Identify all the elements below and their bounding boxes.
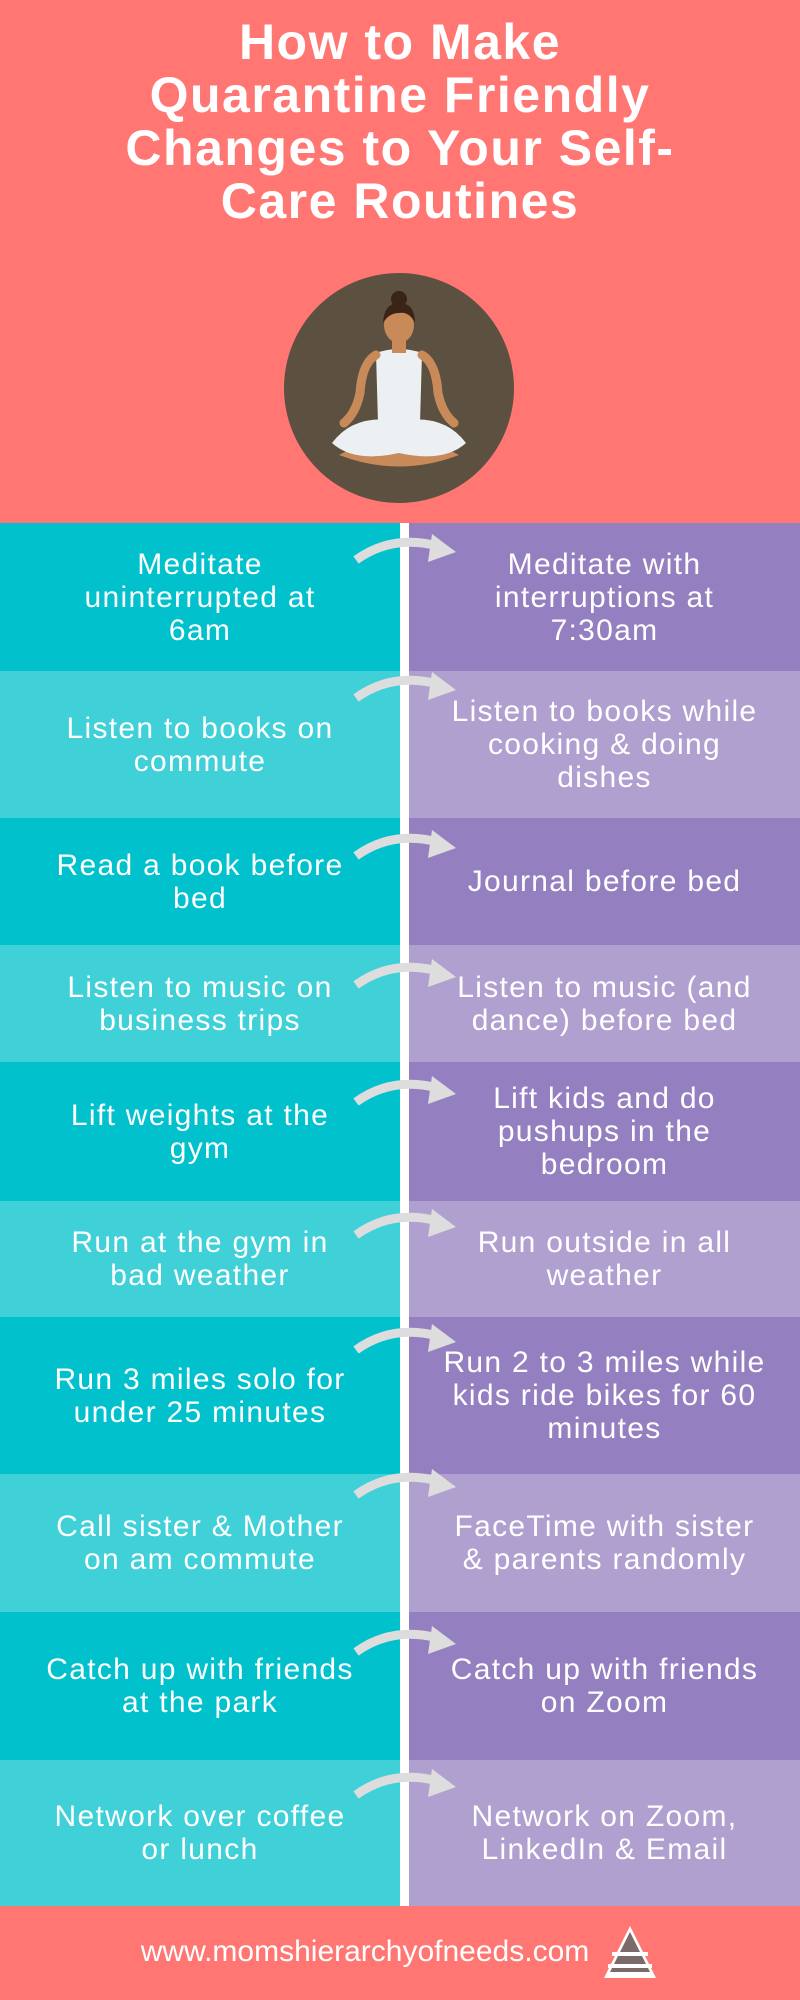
row 8: Call sister & Mother xyxy=(56,1510,344,1543)
row 9: Catch up with friends xyxy=(451,1653,758,1686)
footer xyxy=(0,1906,800,2000)
row 1: 6am xyxy=(169,614,231,646)
row 5: bedroom xyxy=(541,1148,668,1181)
row 4: Listen to music on xyxy=(67,970,333,1004)
row 2: Listen to books on xyxy=(67,712,333,744)
title xyxy=(125,14,675,229)
row 8: FaceTime with sister xyxy=(455,1510,754,1543)
row 3: Read a book before xyxy=(57,848,343,882)
row 5: Lift weights at the xyxy=(71,1098,329,1132)
row 3: bed xyxy=(173,882,227,914)
header xyxy=(0,0,800,523)
row 2 xyxy=(0,671,800,818)
row 8 xyxy=(0,1474,800,1612)
row 6: Run outside in all xyxy=(478,1226,731,1259)
row 9: at the park xyxy=(122,1686,278,1719)
row 10: or lunch xyxy=(141,1833,259,1866)
row 10: Network on Zoom, xyxy=(472,1800,737,1833)
title: Care Routines xyxy=(221,173,579,229)
title: Changes to Your Self- xyxy=(125,120,675,176)
row 7 xyxy=(0,1317,800,1474)
row 6: Run at the gym in xyxy=(71,1226,329,1259)
row 4: business trips xyxy=(99,1004,301,1036)
row 1: Meditate with xyxy=(508,548,701,580)
row 7: minutes xyxy=(547,1412,662,1445)
icon: pyramid logo xyxy=(604,1926,656,1978)
row 2: cooking & doing xyxy=(488,728,721,761)
divider xyxy=(400,523,409,1906)
icon: meditating woman xyxy=(284,273,514,503)
row 4: dance) before bed xyxy=(472,1004,737,1036)
row 10 xyxy=(0,1760,800,1906)
row 9 xyxy=(0,1612,800,1760)
row 4: Listen to music (and xyxy=(457,970,752,1004)
row 1: interruptions at xyxy=(495,580,714,614)
row 6: weather xyxy=(547,1259,662,1292)
row 1 xyxy=(0,523,800,671)
row 2: dishes xyxy=(557,761,652,794)
row 7: Run 2 to 3 miles while xyxy=(443,1346,766,1379)
row 2: Listen to books while xyxy=(452,695,757,728)
footer url: www.momshierarchyofneeds.com xyxy=(141,1935,589,1968)
row 9: on Zoom xyxy=(541,1686,668,1719)
row 1: 7:30am xyxy=(551,614,658,646)
row 6: bad weather xyxy=(110,1259,290,1292)
row 7: under 25 minutes xyxy=(74,1396,326,1428)
row 5: gym xyxy=(170,1132,230,1164)
row 8: on am commute xyxy=(84,1543,316,1576)
row 10: LinkedIn & Email xyxy=(482,1833,727,1866)
title: How to Make xyxy=(239,14,561,70)
row 3 xyxy=(0,818,800,945)
row 7: Run 3 miles solo for xyxy=(54,1362,346,1396)
row 1: uninterrupted at xyxy=(85,580,315,614)
row 1: Meditate xyxy=(137,548,263,580)
row 9: Catch up with friends xyxy=(46,1653,354,1686)
row 6 xyxy=(0,1201,800,1317)
row 8: & parents randomly xyxy=(463,1543,746,1576)
row 3: Journal before bed xyxy=(468,865,741,898)
row 5 xyxy=(0,1062,800,1201)
row 10: Network over coffee xyxy=(55,1800,345,1833)
row 4 xyxy=(0,945,800,1062)
row 2: commute xyxy=(134,744,266,778)
row 5: Lift kids and do xyxy=(493,1082,716,1115)
title: Quarantine Friendly xyxy=(150,67,650,123)
row 5: pushups in the xyxy=(498,1115,711,1148)
row 7: kids ride bikes for 60 xyxy=(453,1379,756,1412)
